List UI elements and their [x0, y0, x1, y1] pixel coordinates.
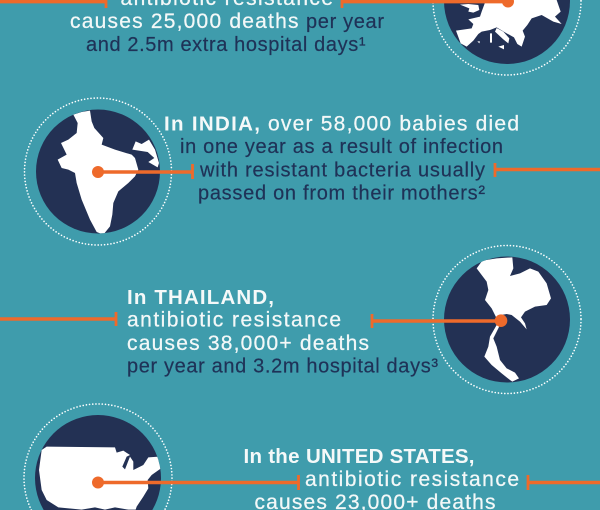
connector: Europe left: [0, 0, 106, 8]
panel: India: [24, 98, 600, 245]
text: Thailand statistic: antibiotic resistance: [127, 309, 341, 332]
panel: Thailand: [0, 246, 581, 394]
text: India statistic: over 58,000 babies died: [268, 113, 519, 136]
panel: Europe: [0, 0, 581, 75]
text: Thailand statistic: per year and 3.2m hospital days³: [127, 356, 438, 378]
text: India statistic: with resistant bacteria usually: [199, 160, 485, 182]
icon: Thailand globe: [433, 246, 581, 394]
text: Europe statistic: [70, 0, 384, 56]
text: United States statistic: [244, 445, 519, 510]
text: India statistic: In INDIA,: [164, 113, 260, 136]
connector: United States left: [92, 475, 298, 490]
icon: India globe: [24, 98, 172, 245]
text: Europe statistic: causes 25,000 deaths: [70, 10, 298, 33]
icon: Europe globe: [433, 0, 581, 75]
text: India statistic: in one year as a result of infection: [180, 136, 503, 158]
text: United States statistic: UNITED STATES,: [306, 445, 474, 468]
text: United States statistic: In the: [244, 445, 300, 468]
icon: United States globe: [24, 404, 172, 510]
text: Thailand statistic: causes 38,000+ deaths: [127, 332, 369, 355]
text: India statistic: [164, 113, 519, 204]
text: Thailand statistic: [127, 286, 438, 378]
text: United States statistic: antibiotic resistance: [305, 468, 519, 491]
connector: United States right: [528, 475, 600, 490]
connector: Thailand right: [372, 314, 507, 328]
text: Europe statistic: per year: [306, 11, 384, 33]
connector: India right: [495, 163, 600, 177]
connector: Thailand left: [0, 312, 116, 326]
text: Europe statistic: and 2.5m extra hospital days¹: [86, 34, 366, 56]
connector: Europe right: [342, 0, 514, 8]
connector: India left: [92, 164, 193, 179]
text: India statistic: passed on from their mothers²: [198, 182, 485, 204]
panel: United States: [24, 404, 600, 510]
text: Thailand statistic: In THAILAND,: [127, 286, 274, 309]
